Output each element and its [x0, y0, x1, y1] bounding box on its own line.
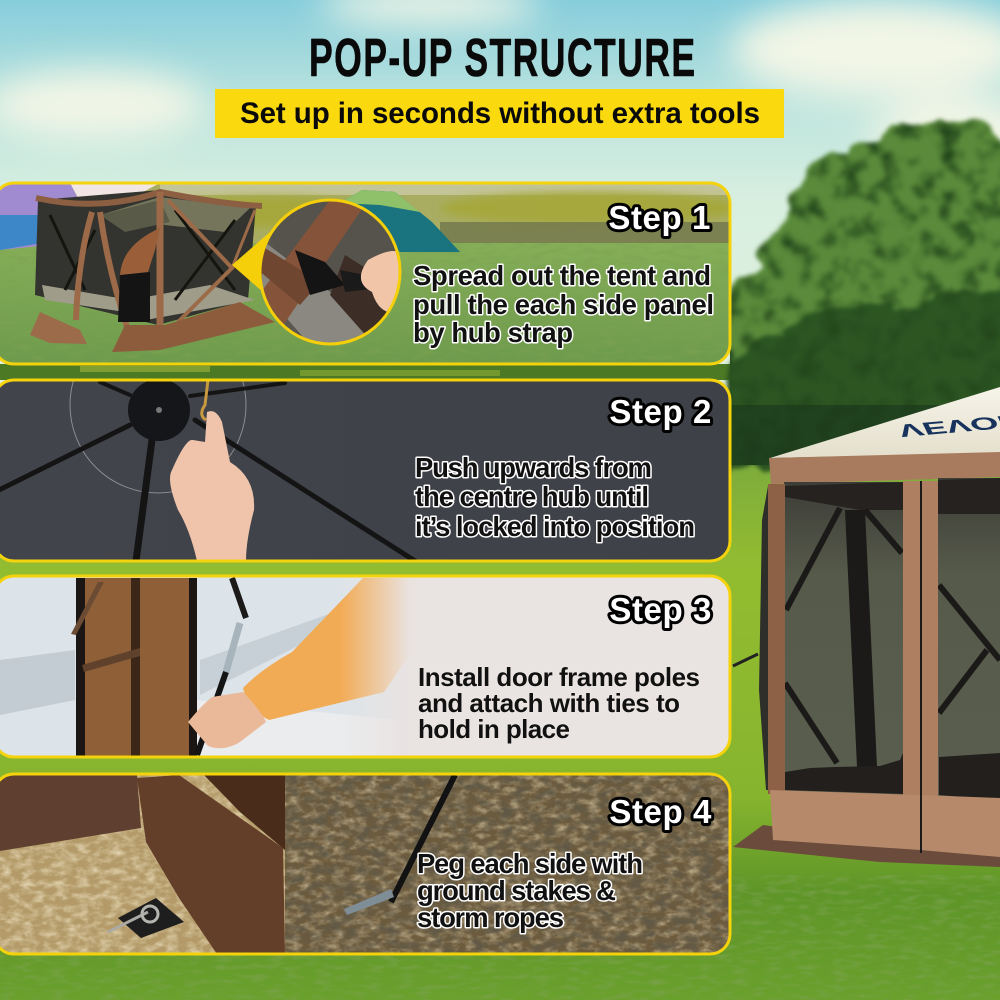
step 3 description: hold in place — [418, 714, 570, 744]
door zipper — [920, 481, 922, 853]
centre hub — [128, 379, 190, 441]
panel border — [0, 380, 730, 561]
step 1 description: by hub strap — [413, 317, 573, 348]
small brown screen tent — [30, 190, 275, 352]
plain right area — [410, 576, 730, 757]
panel border — [0, 774, 730, 954]
guy rope — [733, 654, 758, 666]
hand gripping pole — [188, 692, 266, 748]
step 3 description: and attach with ties to — [418, 688, 680, 718]
step 1 label: Step 1 — [608, 199, 711, 236]
fade to plain panel — [340, 576, 410, 757]
orange sleeve — [243, 578, 420, 720]
step 3 description: Install door frame poles — [418, 662, 700, 692]
brown tarp corner — [0, 774, 285, 954]
tent dark side wall — [759, 486, 772, 790]
hub ring lines — [70, 382, 246, 494]
step 3 floor background — [0, 578, 407, 756]
step 1 description: pull the each side panel — [413, 289, 714, 320]
person in tent — [118, 272, 150, 322]
brown door panel — [71, 578, 197, 757]
step 3 label: Step 3 — [609, 591, 712, 628]
panel: step 1 — [0, 183, 740, 364]
storm rope — [391, 775, 455, 902]
left mesh panel — [784, 482, 904, 798]
dry grass left — [0, 774, 286, 954]
step 3 description — [418, 662, 700, 744]
tent door posts — [903, 481, 938, 799]
step 1 description: Spread out the tent and — [413, 260, 711, 291]
step 4 description: ground stakes & — [417, 875, 616, 906]
step 4 description — [417, 848, 643, 933]
step 2 description — [415, 452, 695, 542]
callout pointer — [232, 232, 270, 290]
step 4 label: Step 4 — [609, 793, 712, 830]
VEVOR logo on roof: VEVOR — [898, 410, 1000, 441]
panel: step 3 — [0, 576, 730, 757]
step 2 description: Push upwards from — [415, 452, 652, 483]
tent valance — [769, 452, 1000, 484]
subtitle banner: Set up in seconds without extra tools — [240, 97, 760, 130]
ground stake — [344, 889, 394, 915]
step 4 description: storm ropes — [417, 902, 564, 933]
green dome tent — [340, 190, 460, 252]
tent bottom skirt — [770, 790, 1000, 857]
stake bracket — [108, 898, 184, 938]
step 1 description — [413, 260, 714, 348]
dry grass right — [285, 774, 730, 954]
large brown screen tent on the right — [733, 387, 1000, 867]
step 2 canopy background — [0, 380, 730, 561]
step 4 description: Peg each side with — [417, 848, 643, 879]
callout inset circle: hub strap — [255, 200, 402, 345]
tent ground tarp — [733, 825, 1000, 867]
hook and strap — [202, 380, 208, 420]
heading: POP-UP STRUCTURE — [309, 28, 695, 88]
canopy poles — [0, 382, 415, 561]
hand pushing the hub — [170, 411, 254, 561]
panel: step 2 — [0, 378, 732, 562]
step 2 description: it’s locked into position — [415, 511, 695, 542]
step 2 description: the centre hub until — [415, 481, 649, 512]
subtitle banner — [215, 89, 784, 138]
tent corner post — [768, 484, 785, 794]
panel border — [0, 576, 730, 757]
step 2 label: Step 2 — [609, 393, 712, 430]
door pole — [197, 578, 246, 755]
mesh frame straps — [784, 478, 1000, 800]
right mesh panel — [938, 478, 1000, 798]
panel border — [0, 183, 730, 364]
tent roof — [770, 387, 1000, 458]
panel: step 4 — [0, 774, 730, 954]
step 1 photo background — [0, 183, 740, 364]
